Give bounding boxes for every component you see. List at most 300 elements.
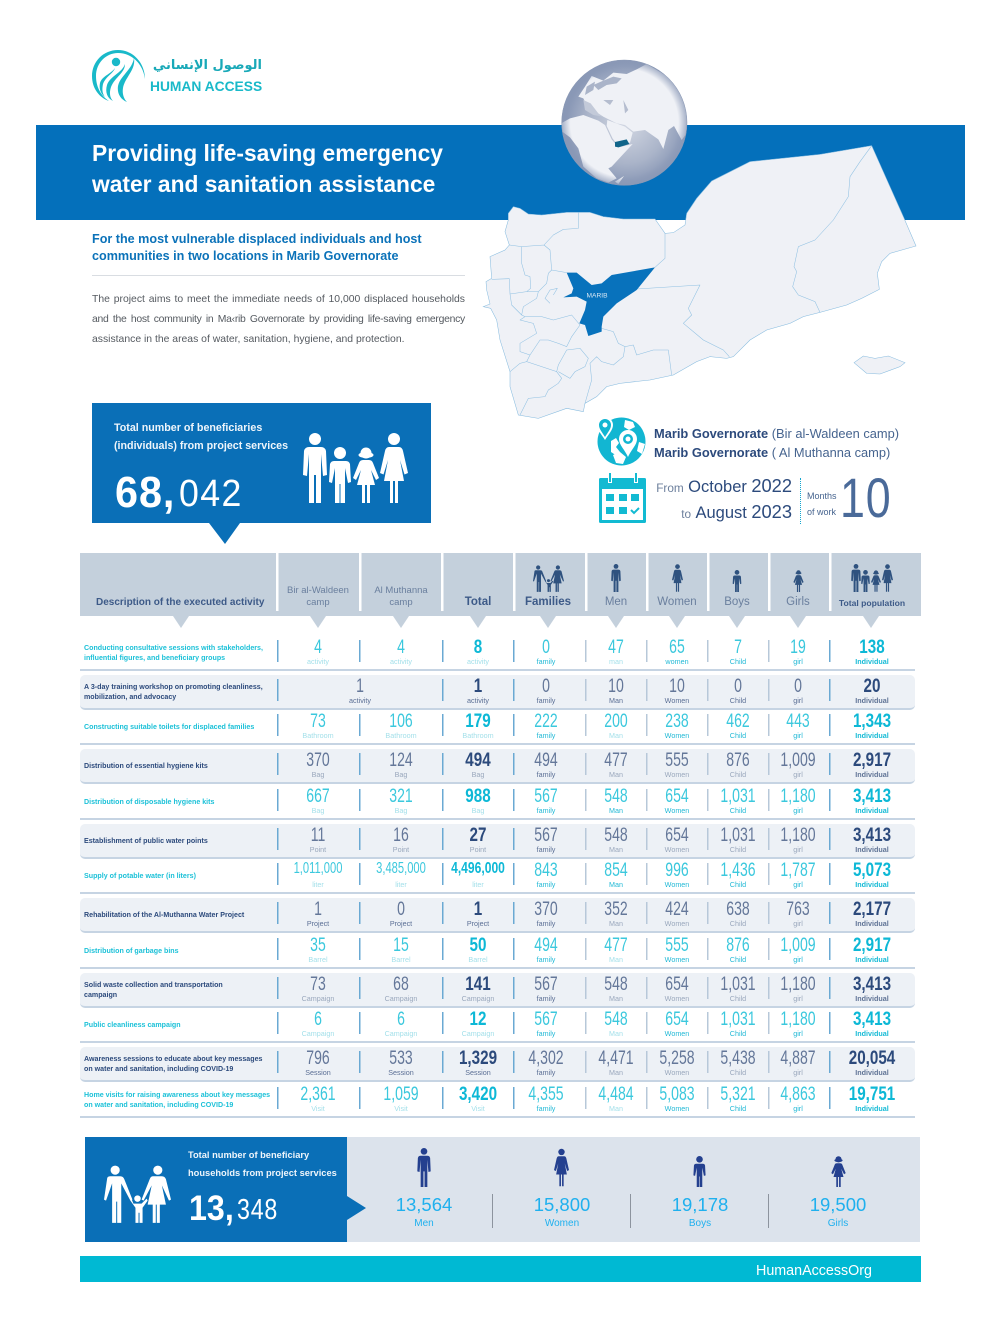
table row 2: training workshop: 1 xyxy=(474,675,482,697)
description: Solid waste collection and transportation xyxy=(84,981,223,989)
table row 12: awareness sessions: 4,887 xyxy=(780,1047,816,1069)
description: A 3-day training workshop on promoting cleanliness, xyxy=(84,683,263,691)
stat: boys: 19,178 xyxy=(672,1194,728,1215)
description: Supply of potable water (in liters) xyxy=(84,872,196,880)
table row 13: home visits: Women xyxy=(665,1104,689,1112)
months label xyxy=(807,491,837,516)
description xyxy=(84,1091,270,1108)
table row 13: home visits: Man xyxy=(609,1104,623,1112)
table row 8: water project rehabilitation: Project xyxy=(390,918,412,928)
table row 1: consultative sessions: 138 xyxy=(859,636,885,658)
table row 9: garbage bins: Individual xyxy=(855,954,889,964)
table row 12: awareness sessions: 20,054 xyxy=(849,1047,895,1069)
table row 8: water project rehabilitation: Project xyxy=(467,918,489,928)
table row 2: training workshop: 1 xyxy=(356,675,364,697)
table row 12: awareness sessions xyxy=(80,1047,915,1082)
table row 3: toilets: 106 xyxy=(389,710,413,732)
table row 3: toilets: Bathroom xyxy=(385,730,417,740)
table row 1: consultative sessions: 7 xyxy=(734,636,742,658)
globe xyxy=(561,60,688,186)
table row 11: public cleanliness campaign: Individual xyxy=(855,1028,889,1038)
table row 4: essential hygiene kits: Bag xyxy=(472,770,484,778)
table row 1: consultative sessions: women xyxy=(665,656,689,666)
table row 7: potable water: 1,011,000 xyxy=(294,860,342,877)
table row 3: toilets: Individual xyxy=(855,730,889,740)
project dates xyxy=(656,475,792,522)
table row 4: essential hygiene kits: 494 xyxy=(534,749,558,771)
months of work xyxy=(807,466,891,529)
icon: calendar xyxy=(599,473,646,523)
subheading: communities in two locations in Marib Governorate xyxy=(92,249,398,263)
households number: 13, xyxy=(189,1189,234,1228)
map of Yemen with Marib highlighted xyxy=(482,145,916,419)
table row 5: disposable hygiene kits: Women xyxy=(665,806,689,814)
table row 9: garbage bins: 477 xyxy=(604,934,628,956)
table row 9: garbage bins: Barrel xyxy=(391,954,411,964)
table row 8: water project rehabilitation: Man xyxy=(609,918,623,928)
table row 8: water project rehabilitation: 370 xyxy=(534,898,558,920)
table row 9: garbage bins: Barrel xyxy=(308,954,328,964)
table row 3: toilets: 73 xyxy=(310,710,326,732)
table row 11: public cleanliness campaign: 6 xyxy=(314,1008,322,1030)
website: HumanAccessOrg xyxy=(756,1262,872,1278)
table row 13: home visits: 4,863 xyxy=(780,1083,816,1105)
table row 11: public cleanliness campaign: Women xyxy=(665,1028,689,1038)
table row 4: essential hygiene kits: 124 xyxy=(389,749,413,771)
table row 4: essential hygiene kits: Man xyxy=(609,770,623,778)
map: governorates outline xyxy=(483,146,916,418)
table row 5: disposable hygiene kits: Man xyxy=(609,806,623,814)
table row 11: public cleanliness campaign: 1,180 xyxy=(780,1008,816,1030)
table row 12: awareness sessions: Session xyxy=(388,1068,414,1076)
households label: households from project services xyxy=(188,1168,337,1178)
table row 2: training workshop xyxy=(80,675,915,710)
table row 11: public cleanliness campaign: girl xyxy=(793,1028,803,1038)
table row 7: potable water: liter xyxy=(472,880,484,888)
description xyxy=(84,644,263,662)
table row 6: public water points: Point xyxy=(470,844,486,854)
table row 5: disposable hygiene kits: 548 xyxy=(604,785,628,807)
intro paragraph: assistance in the areas of water, sanitation, hygiene, and protection. xyxy=(92,334,404,345)
households number xyxy=(189,1188,289,1230)
table row 11: public cleanliness campaign: Campaign xyxy=(462,1028,494,1038)
table row 5: disposable hygiene kits: 654 xyxy=(665,785,689,807)
table row 13: home visits: Individual xyxy=(855,1104,889,1112)
table row 2: training workshop: Individual xyxy=(855,696,889,704)
beneficiaries number xyxy=(115,468,243,517)
table row 10: solid waste campaign: Individual xyxy=(855,994,889,1002)
table row 9: garbage bins: Women xyxy=(665,954,689,964)
table row 12: awareness sessions: 796 xyxy=(306,1047,330,1069)
table row 1: consultative sessions: activity xyxy=(390,656,412,666)
table row 13: home visits: 5,321 xyxy=(720,1083,756,1105)
icon: family with child xyxy=(104,1166,171,1223)
table row 11: public cleanliness campaign: 567 xyxy=(534,1008,558,1030)
table row 3: toilets: 200 xyxy=(604,710,628,732)
table row 10: solid waste campaign: girl xyxy=(793,994,803,1002)
table row 6: public water points: 3,413 xyxy=(853,824,891,846)
table row 11: public cleanliness campaign xyxy=(80,1008,915,1043)
table row 11: public cleanliness campaign: Man xyxy=(609,1028,623,1038)
map: Marib governorate: MARIB xyxy=(586,292,608,299)
table row 6: public water points: 567 xyxy=(534,824,558,846)
table row 2: training workshop: girl xyxy=(793,696,803,704)
table row 6: public water points: Individual xyxy=(855,844,889,854)
column: Men: Men xyxy=(605,596,627,608)
table row 12: awareness sessions: Session xyxy=(465,1068,491,1076)
icon: boy xyxy=(693,1156,706,1187)
icon: boy xyxy=(732,570,742,592)
table row 10: solid waste campaign: Campaign xyxy=(385,994,417,1002)
column: Total: Total xyxy=(465,596,491,608)
table row 6: public water points: Point xyxy=(393,844,409,854)
column: Families xyxy=(525,565,571,608)
table row 6: public water points: 1,031 xyxy=(720,824,756,846)
table row 5: disposable hygiene kits: 1,031 xyxy=(720,785,756,807)
table row 1: consultative sessions: man xyxy=(609,656,623,666)
description xyxy=(84,1055,262,1072)
table row 10: solid waste campaign: 3,413 xyxy=(853,973,891,995)
locations text: Marib Governorate (Bir al-Waldeen camp) xyxy=(654,426,899,440)
table row 10: solid waste campaign: Child xyxy=(730,994,746,1002)
table row 5: disposable hygiene kits: Bag xyxy=(395,806,407,814)
table row 13: home visits: Child xyxy=(730,1104,746,1112)
stat: women xyxy=(502,1148,622,1233)
logo English name: HUMAN ACCESS xyxy=(150,79,262,94)
table row 6: public water points: family xyxy=(537,844,555,854)
table row 6: public water points: Point xyxy=(310,844,326,854)
table row 4: essential hygiene kits: Individual xyxy=(855,770,889,778)
column: Families: Families xyxy=(525,596,571,608)
table row 2: training workshop: Man xyxy=(609,696,623,704)
table row 5: disposable hygiene kits: Child xyxy=(730,806,746,814)
table row 11: public cleanliness campaign: family xyxy=(537,1028,555,1038)
table row 13: home visits xyxy=(80,1083,915,1118)
table row 4: essential hygiene kits: 370 xyxy=(306,749,330,771)
table row 3: toilets xyxy=(80,710,915,745)
table row 7: potable water: liter xyxy=(312,880,324,888)
description: Awareness sessions to educate about key messages xyxy=(84,1055,262,1063)
table row 5: disposable hygiene kits: Individual xyxy=(855,806,889,814)
column: Women: Women xyxy=(657,596,697,608)
table row 11: public cleanliness campaign: 3,413 xyxy=(853,1008,891,1030)
table row 10: solid waste campaign: 68 xyxy=(393,973,409,995)
icon: family xyxy=(533,565,564,592)
table row 8: water project rehabilitation: Women xyxy=(665,918,689,928)
description: Constructing suitable toilets for displaced families xyxy=(84,723,254,731)
beneficiaries label: Total number of beneficiaries xyxy=(114,422,262,434)
table row 3: toilets: Bathroom xyxy=(302,730,334,740)
intro paragraph xyxy=(92,294,466,345)
icon: girl xyxy=(831,1156,846,1187)
map: Marib governorate xyxy=(563,267,655,336)
table row 9: garbage bins: Man xyxy=(609,954,623,964)
table row 3: toilets: Women xyxy=(665,730,689,740)
table row 5: disposable hygiene kits: 1,180 xyxy=(780,785,816,807)
table row 1: consultative sessions: 8 xyxy=(474,636,482,658)
subheading: For the most vulnerable displaced individuals and host xyxy=(92,232,422,246)
table row 1: consultative sessions: 0 xyxy=(542,636,550,658)
table row 9: garbage bins: Barrel xyxy=(468,954,488,964)
stat: men: 13,564 xyxy=(396,1194,452,1215)
table row 8: water project rehabilitation xyxy=(80,898,915,933)
table row 8: water project rehabilitation: 352 xyxy=(604,898,628,920)
table row 12: awareness sessions: family xyxy=(537,1068,555,1076)
table row 2: training workshop: Child xyxy=(730,696,746,704)
table row 10: solid waste campaign: Women xyxy=(665,994,689,1002)
table row 13: home visits: 1,059 xyxy=(383,1083,419,1105)
table row 6: public water points: Child xyxy=(730,844,746,854)
stat: girls xyxy=(778,1156,898,1233)
table row 10: solid waste campaign xyxy=(80,973,915,1008)
table row 13: home visits: family xyxy=(537,1104,555,1112)
table row 1: consultative sessions: activity xyxy=(307,656,329,666)
table row 3: toilets: girl xyxy=(793,730,803,740)
table row 8: water project rehabilitation: Project xyxy=(307,918,329,928)
stat: boys xyxy=(640,1156,760,1233)
table row 4: essential hygiene kits: Women xyxy=(665,770,689,778)
column: Boys xyxy=(724,570,750,608)
panel background with pointer xyxy=(92,403,431,544)
table row 12: awareness sessions: Individual xyxy=(855,1068,889,1076)
table row 3: toilets: Bathroom xyxy=(462,730,494,740)
table row 2: training workshop: 0 xyxy=(542,675,550,697)
table row 11: public cleanliness campaign: 548 xyxy=(604,1008,628,1030)
icon: woman xyxy=(554,1148,569,1187)
panel: total beneficiaries xyxy=(92,403,431,544)
table row 12: awareness sessions: 533 xyxy=(389,1047,413,1069)
column: Women xyxy=(657,564,697,608)
table row 7: potable water: 3,485,000 xyxy=(376,860,426,877)
table row 13: home visits: girl xyxy=(793,1104,803,1112)
table row 10: solid waste campaign: 1,031 xyxy=(720,973,756,995)
icon: logo swoosh mark xyxy=(92,50,145,102)
intro paragraph: and the host community in Ma‹rib Governorate by providing life-saving emergency xyxy=(92,314,465,325)
description: on water and sanitation, including COVID-19 xyxy=(84,1100,233,1108)
icon: man xyxy=(417,1148,431,1187)
table row 7: potable water: 854 xyxy=(604,859,628,881)
logo Arabic name: الوصول الإنساني xyxy=(153,58,262,73)
table row 12: awareness sessions: Session xyxy=(305,1068,331,1076)
table row 1: consultative sessions: family xyxy=(537,656,555,666)
table row 6: public water points xyxy=(80,824,915,859)
table row 1: consultative sessions: 19 xyxy=(790,636,806,658)
table row 9: garbage bins: 15 xyxy=(393,934,409,956)
table row 8: water project rehabilitation: 638 xyxy=(726,898,750,920)
table row 2: training workshop: 10 xyxy=(669,675,685,697)
table row 7: potable water xyxy=(80,859,915,894)
table row 12: awareness sessions: 5,438 xyxy=(720,1047,756,1069)
table row 12: awareness sessions: Child xyxy=(730,1068,746,1076)
table row 8: water project rehabilitation: 0 xyxy=(397,898,405,920)
title: Providing life-saving emergency xyxy=(92,140,443,166)
table row 4: essential hygiene kits: Child xyxy=(730,770,746,778)
table row 3: toilets: family xyxy=(537,730,555,740)
table row 7: potable water: 996 xyxy=(665,859,689,881)
subheading xyxy=(92,232,422,263)
table row 12: awareness sessions: Man xyxy=(609,1068,623,1076)
table row 4: essential hygiene kits: family xyxy=(537,770,555,778)
icon: four people xyxy=(851,564,893,592)
table row 6: public water points: 27 xyxy=(470,824,486,846)
description: Home visits for raising awareness about key messages xyxy=(84,1091,270,1099)
table row 10: solid waste campaign: 73 xyxy=(310,973,326,995)
table row 10: solid waste campaign: 548 xyxy=(604,973,628,995)
description: mobilization, and advocacy xyxy=(84,692,176,700)
table row 6: public water points: 1,180 xyxy=(780,824,816,846)
table row 6: public water points: 548 xyxy=(604,824,628,846)
table row 7: potable water: Women xyxy=(665,880,689,888)
households label xyxy=(188,1150,337,1178)
blue households block with arrow xyxy=(85,1137,366,1242)
table row 7: potable water: family xyxy=(537,880,555,888)
table row 10: solid waste campaign: family xyxy=(537,994,555,1002)
beneficiaries number: 042 xyxy=(179,473,243,515)
table row 11: public cleanliness campaign: 1,031 xyxy=(720,1008,756,1030)
description: Public cleanliness campaign xyxy=(84,1021,181,1029)
table row 7: potable water: 1,436 xyxy=(720,859,756,881)
beneficiaries label xyxy=(114,422,288,452)
stat: men xyxy=(364,1148,484,1233)
table row 4: essential hygiene kits xyxy=(80,749,915,784)
table row 13: home visits: 5,083 xyxy=(659,1083,695,1105)
table row 7: potable water: Man xyxy=(609,880,623,888)
icon: woman xyxy=(672,564,683,592)
stat: girls: 19,500 xyxy=(810,1194,866,1215)
locations text: Marib Governorate ( Al Muthanna camp) xyxy=(654,444,890,460)
table row 9: garbage bins xyxy=(80,934,915,969)
description: Conducting consultative sessions with stakeholders, xyxy=(84,644,263,652)
households label: Total number of beneficiary xyxy=(188,1150,309,1160)
table row 1: consultative sessions: Child xyxy=(730,656,746,666)
table row 8: water project rehabilitation: Child xyxy=(730,918,746,928)
beneficiaries label: (individuals) from project services xyxy=(114,440,288,452)
table row 5: disposable hygiene kits: 321 xyxy=(389,785,413,807)
description: Distribution of disposable hygiene kits xyxy=(84,798,214,806)
description: on water and sanitation, including COVID-19 xyxy=(84,1064,233,1072)
stat: men: Men xyxy=(414,1218,434,1229)
table row 3: toilets: 222 xyxy=(534,710,558,732)
table row 12: awareness sessions: Women xyxy=(665,1068,689,1076)
table row 1: consultative sessions: 65 xyxy=(669,636,685,658)
table row 8: water project rehabilitation: 1 xyxy=(474,898,482,920)
table row 8: water project rehabilitation: Individual xyxy=(855,918,889,928)
households number: 348 xyxy=(237,1194,278,1226)
table row 9: garbage bins: 876 xyxy=(726,934,750,956)
stat: boys: Boys xyxy=(689,1218,711,1229)
column: Bir al-Waldeen camp xyxy=(287,584,349,608)
table row 7: potable water: liter xyxy=(395,880,407,888)
table row 10: solid waste campaign: 567 xyxy=(534,973,558,995)
table row 3: toilets: Child xyxy=(730,730,746,740)
table row 9: garbage bins: girl xyxy=(793,954,803,964)
column: Bir al-Waldeen camp: camp xyxy=(306,597,330,608)
table row 2: training workshop: family xyxy=(537,696,555,704)
table row 6: public water points: 16 xyxy=(393,824,409,846)
table row 13: home visits: 2,361 xyxy=(300,1083,336,1105)
table row 12: awareness sessions: 4,302 xyxy=(528,1047,564,1069)
stat: women: Women xyxy=(545,1218,579,1229)
table row 11: public cleanliness campaign: Campaign xyxy=(385,1028,417,1038)
table row 2: training workshop: activity xyxy=(467,696,489,704)
table row 11: public cleanliness campaign: 654 xyxy=(665,1008,689,1030)
table row 11: public cleanliness campaign: Campaign xyxy=(302,1028,334,1038)
table row 3: toilets: 238 xyxy=(665,710,689,732)
table row 5: disposable hygiene kits: 3,413 xyxy=(853,785,891,807)
description xyxy=(84,683,263,700)
table row 6: public water points: 11 xyxy=(311,824,325,846)
table row 7: potable water: 5,073 xyxy=(853,859,891,881)
table row 3: toilets: 1,343 xyxy=(853,710,891,732)
project dates: to August 2023 xyxy=(681,501,792,522)
table row 7: potable water: Individual xyxy=(855,880,889,888)
table row 5: disposable hygiene kits: 988 xyxy=(465,785,491,807)
table row 8: water project rehabilitation: 1 xyxy=(314,898,322,920)
table row 8: water project rehabilitation: 2,177 xyxy=(853,898,891,920)
table row 6: public water points: Man xyxy=(609,844,623,854)
table row 9: garbage bins: 50 xyxy=(470,934,486,956)
column: Total population xyxy=(838,564,905,608)
table row 8: water project rehabilitation: 424 xyxy=(665,898,689,920)
table row 13: home visits: Visit xyxy=(471,1104,485,1112)
column: Al Muthanna camp: Al Muthanna xyxy=(374,584,428,596)
table row 4: essential hygiene kits: 876 xyxy=(726,749,750,771)
table row 4: essential hygiene kits: 477 xyxy=(604,749,628,771)
title xyxy=(92,140,443,197)
table row 1: consultative sessions: girl xyxy=(793,656,803,666)
table row 7: potable water: 843 xyxy=(534,859,558,881)
title banner xyxy=(36,125,965,220)
table row 13: home visits: 4,355 xyxy=(528,1083,564,1105)
description: Distribution of garbage bins xyxy=(84,947,179,955)
table row 10: solid waste campaign: Man xyxy=(609,994,623,1002)
table row 9: garbage bins: 555 xyxy=(665,934,689,956)
table row 9: garbage bins: 494 xyxy=(534,934,558,956)
table row 10: solid waste campaign: Campaign xyxy=(302,994,334,1002)
description: influential figures, and beneficiary groups xyxy=(84,654,225,662)
table row 1: consultative sessions: activity xyxy=(467,656,489,666)
table row 10: solid waste campaign: 1,180 xyxy=(780,973,816,995)
table row 2: training workshop: activity xyxy=(349,696,371,704)
table row 4: essential hygiene kits: 494 xyxy=(465,749,491,771)
panel: beneficiary households xyxy=(85,1137,920,1242)
intro paragraph: The project aims to meet the immediate needs of 10,000 displaced households xyxy=(92,294,465,305)
table row 11: public cleanliness campaign: Child xyxy=(730,1028,746,1038)
table row 9: garbage bins: 35 xyxy=(310,934,326,956)
description: Rehabilitation of the Al-Muthanna Water Project xyxy=(84,911,244,919)
table row 8: water project rehabilitation: girl xyxy=(793,918,803,928)
table row 3: toilets: 443 xyxy=(786,710,810,732)
column: description: Description of the executed activity xyxy=(96,597,264,608)
table row 2: training workshop: 0 xyxy=(794,675,802,697)
column: Girls: Girls xyxy=(786,596,810,608)
title: water and sanitation assistance xyxy=(92,171,435,197)
table row 5: disposable hygiene kits: 667 xyxy=(306,785,330,807)
table row 7: potable water: 1,787 xyxy=(780,859,816,881)
table row 4: essential hygiene kits: 555 xyxy=(665,749,689,771)
table row 12: awareness sessions: girl xyxy=(793,1068,803,1076)
description: Establishment of public water points xyxy=(84,837,208,845)
table row 1: consultative sessions: 4 xyxy=(397,636,405,658)
table row 1: consultative sessions: 47 xyxy=(608,636,624,658)
column: Girls xyxy=(786,570,810,608)
table row 8: water project rehabilitation: family xyxy=(537,918,555,928)
project dates: From October 2022 xyxy=(656,475,792,496)
table row 9: garbage bins: family xyxy=(537,954,555,964)
table row 2: training workshop: Women xyxy=(665,696,689,704)
table row 7: potable water: 4,496,000 xyxy=(451,860,505,877)
table row 13: home visits: 4,484 xyxy=(598,1083,634,1105)
